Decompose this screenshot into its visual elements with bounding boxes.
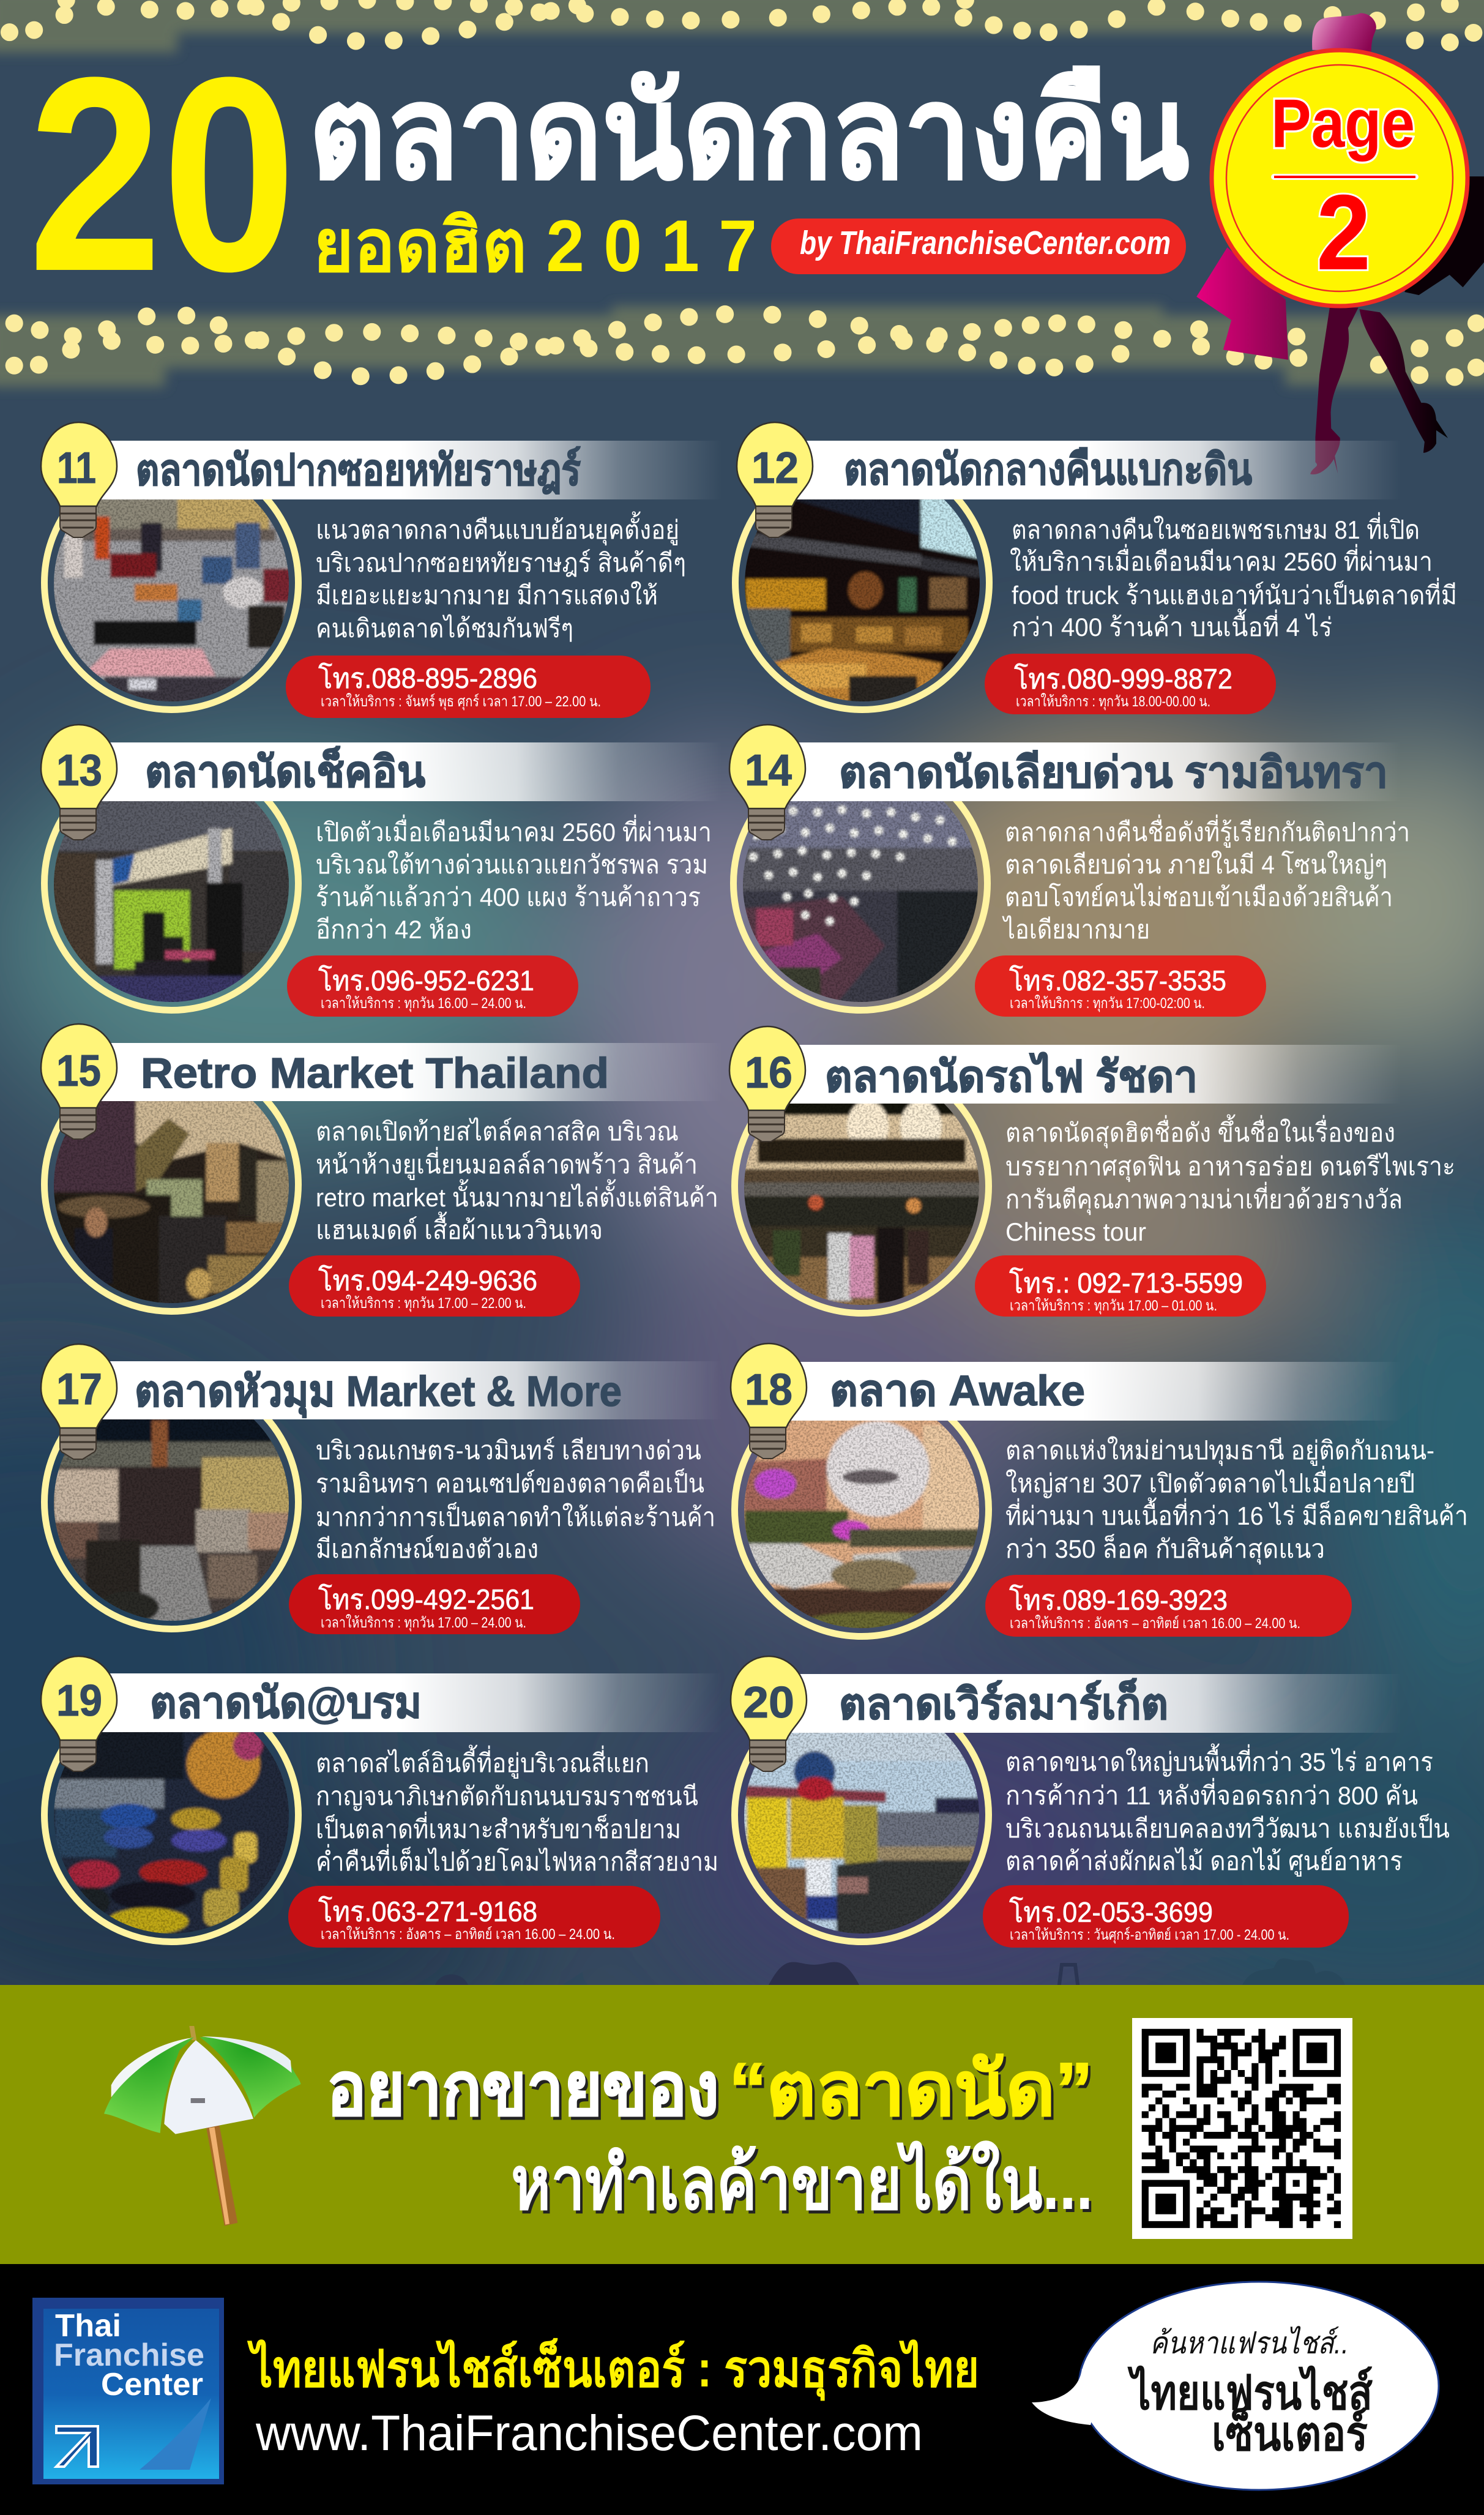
contact pill: โทร.089-169-3923 [1009,1584,1228,1616]
description [1010,512,1457,641]
decorative light strip: top [0,0,1484,53]
description: ตลาดนัดสุดฮิตชื่อดัง ขึ้นชื่อในเรื่องของ [1005,1114,1395,1149]
heading: ตลาดนัดเช็คอิน [145,746,425,796]
heading: ตลาดนัดรถไฟ รัชดา [825,1052,1198,1101]
number: 17 [56,1365,102,1414]
description [1005,1114,1455,1246]
description [316,1436,715,1563]
slogan line 1: อยากขายของ [327,2047,719,2131]
background silhouettes [435,1959,1345,1989]
photo: market 16 [739,1065,984,1310]
description: ร้านค้าแล้วกว่า 400 แผง ร้านค้าถาวร [316,883,701,911]
description: ใหญ่สาย 307 เปิดตัวตลาดไปเมื่อปลายปี [1005,1466,1415,1498]
description [1005,1743,1450,1877]
description [1002,815,1410,944]
description: Chiness tour [1005,1217,1146,1246]
number: 12 [751,444,799,493]
contact pill: เวลาให้บริการ : อังคาร – อาทิตย์ เวลา 16.00 – 24.00 น. [1010,1615,1300,1632]
description: คนเดินตลาดได้ชมกันฟรีๆ [316,614,573,643]
description: บริเวณเกษตร-นวมินทร์ เลียบทางด่วน [316,1436,701,1465]
contact pill [289,1574,580,1634]
description: แนวตลาดกลางคืนแบบย้อนยุคตั้งอยู่ [316,511,679,546]
description: ตลาดสไตล์อินดี้ที่อยู่บริเวณสี่แยก [316,1744,649,1779]
number: 19 [56,1676,102,1725]
heading: ตลาดเวิร์ลมาร์เก็ต [839,1678,1168,1728]
photo ring [734,1688,989,1941]
panel: market 16 [729,1026,1455,1317]
description: บริเวณใต้ทางด่วนแถวแยกวัชรพล รวม [316,850,708,879]
heading: Retro Market Thailand [141,1049,609,1097]
QR code [1132,2018,1352,2239]
description: กว่า 350 ล็อค กับสินค้าสุดแนว [1005,1534,1325,1565]
description [316,815,712,944]
panel: black footer [0,2264,1484,2515]
title band [771,441,1401,499]
description: การันตีคุณภาพความน่าเที่ยวด้วยรางวัล [1005,1182,1403,1216]
illustration: shopping woman with bags [1196,13,1484,474]
bulb icon [729,725,805,840]
badge: page 2: Page [1271,85,1415,162]
description: กว่า 400 ร้านค้า บนเนื้อที่ 4 ไร่ [1012,608,1332,641]
bulb icon [41,422,117,537]
number: 16 [745,1048,792,1097]
photo ring [44,1058,299,1311]
contact pill [289,1255,580,1317]
panel: market 20 [731,1656,1450,1948]
logo: Thai Franchise Center: Thai [55,2308,121,2344]
contact pill [286,656,651,718]
heading: ตลาดนัดกลางคืนแบกะดิน [844,446,1252,493]
bulb icon [41,725,117,840]
photo: market 17 [49,1381,294,1626]
speech bubble: ไทยแฟรนไชส์ [1127,2365,1373,2420]
panel: market 14 [729,725,1410,1017]
description: บริเวณปากซอยหทัยราษฎร์ สินค้าดีๆ [316,548,686,577]
photo: market 12 [745,499,980,701]
contact pill: โทร.02-053-3699 [1009,1896,1213,1928]
photo ring [734,1059,989,1314]
number: 14 [745,746,792,795]
description: บริเวณถนนเลียบคลองทวีวัฒนา แถมยังเป็น [1005,1814,1450,1843]
photo: market 15 [49,1063,294,1308]
bulb icon [731,1656,807,1771]
description: มีเยอะแยะมากมาย มีการแสดงให้ [316,581,658,610]
heading: ตลาดนัดปากซอยหทัยราษฎร์ [136,446,581,495]
contact pill: เวลาให้บริการ : อังคาร – อาทิตย์ เวลา 16.00 – 24.00 น. [321,1926,615,1943]
photo ring [733,757,988,1010]
logo: Thai Franchise Center: Center [101,2367,203,2402]
contact pill: เวลาให้บริการ : ทุกวัน 17.00 – 01.00 น. [1010,1297,1217,1315]
photo ring [44,1375,299,1629]
heading: ตลาด Awake [830,1367,1085,1414]
slogan line 1 [327,2047,1093,2131]
panel: market 15 [41,1024,722,1317]
panel: market 12 [736,422,1457,714]
bulb icon [41,1656,117,1771]
slogan line 1: “ตลาดนัด” [729,2047,1093,2131]
contact pill: เวลาให้บริการ : ทุกวัน 17.00 – 22.00 น. [321,1295,526,1312]
description: อีกกว่า 42 ห้อง [316,915,472,944]
decorative light strip: lower [0,305,1484,387]
tagline: ไทยแฟรนไชส์เซ็นเตอร์ : รวมธุรกิจไทย [247,2337,979,2401]
red pill: by ThaiFranchiseCenter.com: by ThaiFranchiseCenter.com [800,225,1171,261]
description: ตลาดกลางคืนชื่อดังที่รู้เรียกกันติดปากว่า [1005,815,1410,848]
photo ring [734,1382,989,1637]
contact pill: โทร.099-492-2561 [318,1583,534,1615]
description: บรรยากาศสุดฟิน อาหารอร่อย ดนตรีไพเราะ [1005,1152,1455,1183]
description: food truck ร้านแฮงเอาท์นับว่าเป็นตลาดที่มี [1012,578,1457,610]
description: รามอินทรา คอนเซปต์ของตลาดคือเป็น [316,1468,704,1498]
description: แฮนเมดด์ เสื้อผ้าแนววินเทจ [316,1211,603,1244]
title band [765,1674,1401,1733]
badge: page 2: 2 [1316,173,1371,293]
subtitle: popular 2017: ยอดฮิต 2 0 1 7 [313,205,757,287]
contact pill [975,955,1266,1017]
description: ตอบโจทย์คนไม่ชอบเข้าเมืองด้วยสินค้า [1005,882,1393,911]
title band [80,742,722,801]
red pill: by ThaiFranchiseCenter.com [771,219,1186,274]
panel: market 17 [41,1344,722,1634]
bulb icon [41,1024,117,1139]
contact pill: โทร.080-999-8872 [1014,663,1232,695]
contact pill: เวลาให้บริการ : ทุกวัน 17:00-02:00 น. [1010,995,1205,1012]
description: ตลาดขนาดใหญ่บนพื้นที่กว่า 35 ไร่ อาคาร [1005,1743,1433,1777]
number: 20 [743,1678,794,1727]
description: เป็นตลาดที่เหมาะสำหรับขาช็อปยาม [316,1812,681,1844]
speech bubble: ค้นหาแฟรนไชส์.. [1150,2326,1349,2360]
contact pill [985,654,1276,714]
bulb icon [41,1344,117,1459]
description [316,1744,718,1876]
bulb icon [731,1343,807,1459]
logo: Thai Franchise Center: Franchise [54,2337,204,2373]
description: การค้ากว่า 11 หลังที่จอดรถกว่า 800 คัน [1005,1778,1418,1810]
heading: ตลาดนัด@บรม [150,1679,422,1727]
number: 13 [56,746,102,795]
title band [765,1045,1401,1104]
description: retro market นั้นมากมายไล่ตั้งแต่สินค้า [316,1179,718,1212]
contact pill [985,1575,1352,1637]
number: 18 [745,1366,792,1414]
title: number 20: 20 [28,20,296,329]
contact pill [287,955,578,1017]
photo ring [44,455,299,710]
description: ให้บริการเมื่อเดือนมีนาคม 2560 ที่ผ่านมา [1010,544,1433,576]
photo ring [44,1688,299,1941]
heading: ตลาดหัวมุม Market & More [135,1367,622,1418]
contact pill: เวลาให้บริการ : จันทร์ พุธ ศุกร์ เวลา 17.00 – 22.00 น. [321,693,601,711]
photo: market 18 [739,1388,984,1633]
contact pill: โทร.082-357-3535 [1009,965,1226,996]
description: หน้าห้างยูเนี่ยนมอลล์ลาดพร้าว สินค้า [316,1147,698,1180]
contact pill: โทร.: 092-713-5599 [1009,1267,1243,1299]
description: กาญจนาภิเษกตัดกับถนนบรมราชชนนี [316,1782,698,1811]
heading: ตลาดนัดเลียบด่วน รามอินทรา [839,749,1388,796]
description: ตลาดเปิดท้ายสไตล์คลาสสิค บริเวณ [316,1117,679,1146]
contact pill: โทร.094-249-9636 [318,1265,537,1296]
photo: market 19 [49,1694,294,1938]
contact pill [288,1886,660,1948]
title: night markets heading: ตลาดนัดกลางคืน [309,60,1189,205]
contact pill: โทร.088-895-2896 [318,662,537,694]
photo: market 14 [738,762,983,1007]
panel: market 11 [41,422,722,718]
panel: olive call to action [0,1985,1484,2264]
speech bubble [1032,2282,1439,2490]
photo ring [736,455,989,710]
description: มีเอกลักษณ์ของตัวเอง [316,1534,539,1563]
website url: www.ThaiFranchiseCenter.com [255,2405,923,2461]
description [1005,1436,1468,1565]
bulb icon [737,422,813,537]
description [316,1117,718,1244]
panel: market 13 [41,725,722,1017]
photo: market 11 [54,499,289,701]
description: ตลาดเลียบด่วน ภายในมี 4 โซนใหญ่ๆ [1005,850,1387,880]
photo: market 13 [49,762,294,1007]
contact pill: โทร.096-952-6231 [318,965,534,996]
description: เปิดตัวเมื่อเดือนมีนาคม 2560 ที่ผ่านมา [316,815,712,846]
description: ตลาดค้าส่งผักผลไม้ ดอกไม้ ศูนย์อาหาร [1005,1847,1403,1877]
title band [80,1361,722,1419]
description [316,511,686,643]
contact pill: เวลาให้บริการ : ทุกวัน 18.00-00.00 น. [1016,693,1210,711]
description: ตลาดแห่งใหม่ย่านปทุมธานี อยู่ติดกับถนน- [1005,1436,1434,1467]
title band [80,441,722,499]
title band [80,1043,722,1101]
slogan line 2: หาทำเลค้าขายได้ใน... [511,2140,1093,2225]
contact pill: เวลาให้บริการ : วันศุกร์-อาทิตย์ เวลา 17.00 - 24.00 น. [1010,1926,1289,1944]
description: มากกว่าการเป็นตลาดทำให้แต่ละร้านค้า [316,1502,715,1531]
panel: market 19 [41,1656,722,1948]
contact pill: เวลาให้บริการ : ทุกวัน 17.00 – 24.00 น. [321,1614,526,1632]
badge: page 2 [1212,50,1467,306]
title band [80,1673,722,1732]
description: ตลาดกลางคืนในซอยเพชรเกษม 81 ที่เปิด [1012,512,1420,544]
title band [765,742,1401,801]
contact pill: เวลาให้บริการ : ทุกวัน 16.00 – 24.00 น. [321,995,526,1012]
contact pill [983,1885,1349,1948]
logo: Thai Franchise Center [32,2298,224,2484]
contact pill [975,1255,1266,1317]
panel: market 18 [731,1343,1468,1637]
photo ring [44,757,299,1010]
description: ค่ำคืนที่เต็มไปด้วยโคมไฟหลากสีสวยงาม [316,1844,718,1876]
title band [765,1362,1401,1421]
speech bubble: เซ็นเตอร์ [1212,2405,1368,2461]
number: 11 [57,444,96,493]
number: 15 [56,1047,101,1096]
description: ไอเดียมากมาย [1002,915,1150,944]
bulb icon [729,1026,805,1142]
icon: umbrella [104,2026,301,2226]
photo: market 20 [739,1694,984,1938]
contact pill: โทร.063-271-9168 [318,1896,537,1927]
